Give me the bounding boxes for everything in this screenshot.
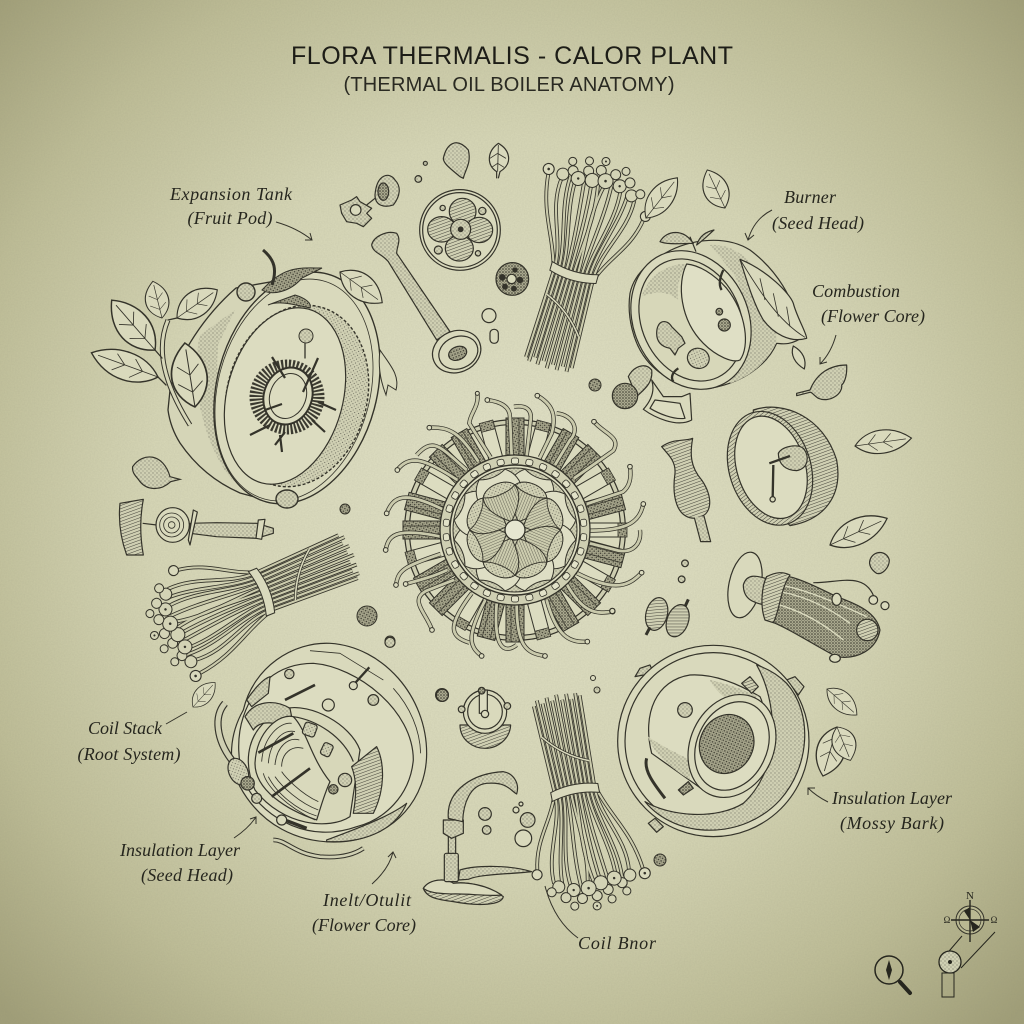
left root bundle: [129, 501, 376, 691]
right fin: [352, 747, 383, 813]
label: burner: [745, 187, 864, 240]
curling tendrils: [383, 391, 646, 658]
label: insulation layer seed head: [119, 817, 256, 886]
rivets: [237, 283, 255, 301]
screws: [277, 815, 287, 825]
small seeds: [415, 143, 509, 343]
expansion tank ring, top left: [86, 250, 405, 523]
cylinder bundle and mossy ring: [610, 549, 889, 837]
coil centre: [256, 366, 318, 428]
label: combustion: (Flower Core): [821, 306, 925, 327]
pot and faucet: [423, 687, 535, 904]
label: insulation layer seed head: Insulation Layer: [119, 840, 241, 860]
label: burner: (Seed Head): [772, 213, 864, 234]
bottom root bundle: [499, 684, 655, 921]
burner parts: [657, 322, 685, 355]
label: coil burner: Coil Bnor: [578, 933, 657, 953]
label: coil burner: [545, 886, 657, 953]
label: burner: Burner: [784, 187, 837, 207]
faucet: [423, 689, 535, 904]
label: insulation layer mossy bark: (Mossy Bark): [840, 813, 944, 834]
icon: magnifier: [875, 956, 910, 993]
label: combustion: Combustion: [812, 281, 900, 301]
pestle: [372, 232, 487, 380]
tank body: [168, 275, 370, 503]
flower disc: [420, 190, 500, 270]
front ring: [609, 231, 773, 409]
left pipe: [218, 703, 232, 760]
leaf left: [133, 457, 180, 489]
icon: compass rose with pipe: N: [966, 890, 974, 902]
label: expansion tank: (Fruit Pod): [188, 208, 272, 229]
burner ring, top right: [609, 230, 807, 409]
label: combustion: [812, 281, 925, 364]
combustion leaf: [797, 365, 847, 400]
label: coil stack: [78, 712, 187, 765]
icon: compass rose with pipe: Ω: [991, 915, 998, 925]
hatched wheel: [713, 400, 838, 536]
leaves right: [824, 426, 913, 556]
title: FLORA THERMALIS - CALOR PLANT: [291, 42, 733, 70]
top items group: [340, 143, 529, 380]
icon: compass rose with pipe: Ω: [944, 915, 951, 925]
label: insulation layer seed head: (Seed Head): [141, 865, 233, 886]
flower petals: [451, 466, 579, 594]
title: [291, 42, 733, 96]
label: inlet outlet: (Flower Core): [312, 915, 416, 936]
label: insulation layer mossy bark: [808, 788, 953, 834]
burner leaf: [740, 259, 807, 340]
label: expansion tank: Expansion Tank: [169, 184, 293, 204]
small bead seeds: [340, 379, 666, 866]
coil ring: [248, 708, 360, 824]
label: inlet outlet: [312, 852, 416, 936]
small rollers: [610, 560, 693, 640]
key: [119, 499, 273, 555]
bulb: [662, 438, 711, 542]
pot: [458, 687, 511, 748]
burner body: [629, 240, 803, 388]
outer rim: [407, 422, 623, 638]
title: (THERMAL OIL BOILER ANATOMY): [344, 74, 674, 96]
tank front ring: [189, 253, 405, 523]
top root bundle: [490, 142, 663, 384]
central flower wheel: [383, 391, 646, 658]
label: coil stack: (Root System): [78, 744, 180, 765]
label: expansion tank: [169, 184, 312, 240]
seed disc: [496, 263, 529, 295]
right side small parts: [612, 365, 847, 542]
drum with sphere: [649, 675, 764, 790]
label: inlet outlet: Inelt/Otulit: [322, 890, 412, 910]
vine and leaves: [162, 320, 190, 425]
label: insulation layer mossy bark: Insulation Layer: [831, 788, 953, 808]
mossy ring: [618, 645, 809, 837]
top right leaves: [636, 165, 736, 225]
small flowers: [340, 175, 399, 227]
outer shell: [232, 643, 427, 842]
cylinder bundle: [722, 549, 889, 662]
bottom tube: [273, 840, 363, 857]
bead ring: [440, 455, 590, 605]
small leaves lower left: [186, 676, 221, 712]
radial spokes: [403, 418, 627, 642]
valve: [612, 366, 692, 423]
label: coil stack: Coil Stack: [88, 718, 163, 738]
coil stack ring, bottom left: [218, 637, 427, 857]
icon: compass rose with pipe: [939, 890, 998, 997]
leaves lower right: [810, 681, 864, 780]
